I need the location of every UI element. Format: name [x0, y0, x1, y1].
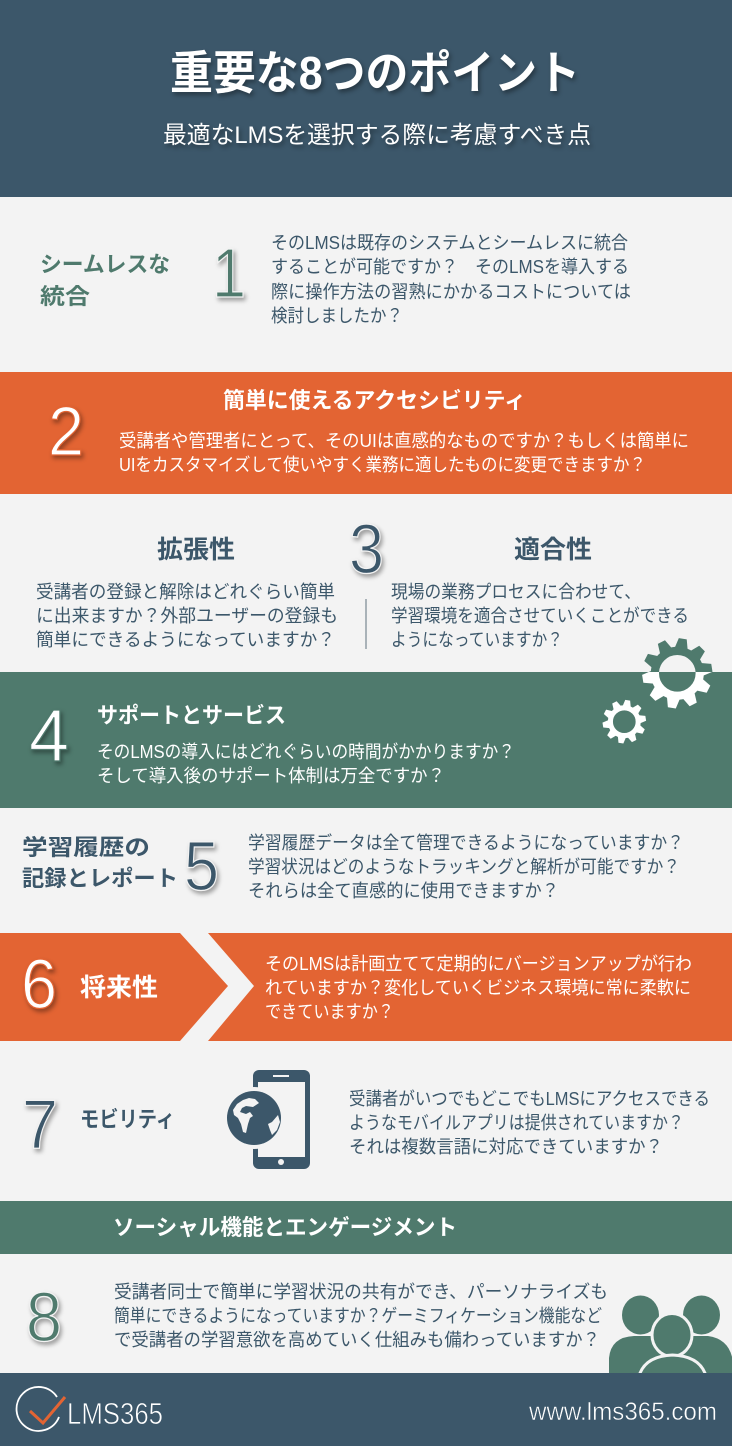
text block 3 left [36, 582, 338, 650]
heading: learning records: 学習履歴の [22, 835, 150, 860]
heading: learning records [22, 835, 178, 891]
text block 7 [349, 1089, 710, 1157]
text block 3 right [391, 582, 689, 650]
text block 3 left: に出来ますか？外部ユーザーの登録も [36, 606, 338, 626]
panel: 3 scalability and fit [0, 494, 732, 672]
number 8: 8 [26, 1278, 62, 1356]
text block 6 [265, 954, 692, 1022]
panel: 1 seamless integration [0, 197, 732, 372]
heading: seamless integration: シームレスな [40, 252, 170, 277]
number 5: 5 [184, 827, 219, 905]
heading: future-proofing: 将来性 [80, 974, 158, 1002]
text block 8: で受講者の学習意欲を高めていく仕組みも備わっていますか？ [114, 1330, 600, 1350]
text block 8 [114, 1282, 608, 1350]
text block 4: そのLMSの導入にはどれぐらいの時間がかかりますか？ [97, 742, 515, 762]
number 1: 1 [212, 234, 246, 312]
panel: 7 mobility [0, 1041, 732, 1201]
text block 2 [119, 431, 689, 475]
text block 4: そして導入後のサポート体制は万全ですか？ [97, 766, 445, 786]
text block 6: れていますか？変化していくビジネス環境に常に柔軟に [265, 978, 691, 998]
text block 5 [248, 833, 684, 901]
text block 6: できていますか？ [265, 1002, 394, 1022]
arrow: right chevron [208, 933, 732, 1041]
text block 3 right: 現場の業務プロセスに合わせて、 [391, 582, 641, 602]
arrow: left chevron [0, 933, 228, 1041]
panel: footer [0, 1373, 732, 1446]
heading: scalability: 拡張性 [157, 536, 235, 564]
icon: people [609, 1296, 732, 1376]
heading: accessibility: 簡単に使えるアクセシビリティ [223, 388, 526, 413]
panel: 5 learning records [0, 808, 732, 933]
heading: learning records: 記録とレポート [22, 866, 178, 891]
heading: support: サポートとサービス [97, 703, 286, 728]
heading: social engagement: ソーシャル機能とエンゲージメント [113, 1215, 457, 1240]
subtitle: 最適なLMSを選択する際に考慮すべき点 [163, 122, 591, 149]
website url: www.lms365.com [528, 1398, 717, 1426]
number 3: 3 [349, 510, 384, 588]
heading: mobility: モビリティ [80, 1107, 175, 1132]
text block 1: そのLMSは既存のシステムとシームレスに統合 [271, 233, 628, 253]
text block 3 right: 学習環境を適合させていくことができる [391, 606, 689, 626]
divider [365, 599, 367, 649]
text block 5: それらは全て直感的に使用できますか？ [248, 881, 559, 901]
icon: phone and globe [223, 1070, 310, 1169]
text block 1: 検討しましたか？ [271, 306, 403, 326]
heading: fit: 適合性 [514, 536, 592, 564]
text block 1 [271, 233, 631, 326]
title: 重要な8つのポイント [170, 47, 580, 99]
number 2: 2 [48, 392, 84, 470]
text block 1: 際に操作方法の習熟にかかるコストについては [271, 282, 631, 302]
text block 7: それは複数言語に対応できていますか？ [349, 1137, 663, 1157]
logo [17, 1387, 163, 1431]
text block 8: 簡単にできるようになっていますか？ゲーミフィケーション機能など [114, 1306, 602, 1326]
heading: seamless integration: 統合 [40, 284, 90, 309]
panel: 6 future-proofing [0, 933, 732, 1041]
text block 5: 学習状況はどのようなトラッキングと解析が可能ですか？ [248, 857, 680, 877]
text block 4 [97, 742, 515, 786]
number 7: 7 [22, 1085, 58, 1163]
heading: seamless integration [40, 252, 170, 309]
text block 2: UIをカスタマイズして使いやすく業務に適したものに変更できますか？ [119, 455, 646, 475]
panel: 8 social engagement [0, 1201, 732, 1376]
number 4: 4 [29, 694, 69, 777]
text block 2: 受講者や管理者にとって、そのUIは直感的なものですか？もしくは簡単に [119, 431, 689, 451]
text block 3 left: 受講者の登録と解除はどれぐらい簡単 [36, 582, 335, 602]
icon: gears [602, 638, 713, 744]
heading band [0, 1201, 732, 1254]
number 6: 6 [21, 945, 57, 1023]
panel: 2 accessibility [0, 372, 732, 494]
text block 7: ようなモバイルアプリは提供されていますか？ [349, 1113, 684, 1133]
text block 1: することが可能ですか？ そのLMSを導入する [271, 257, 629, 277]
text block 8: 受講者同士で簡単に学習状況の共有ができ、パーソナライズも [114, 1282, 608, 1302]
panel: 4 support [0, 638, 732, 808]
text block 6: そのLMSは計画立てて定期的にバージョンアップが行わ [265, 954, 692, 974]
panel: header [0, 0, 732, 197]
logo: LMS365 [67, 1396, 163, 1431]
text block 3 left: 簡単にできるようになっていますか？ [36, 630, 335, 650]
text block 3 right: ようになっていますか？ [391, 630, 563, 650]
text block 5: 学習履歴データは全て管理できるようになっていますか？ [248, 833, 684, 853]
